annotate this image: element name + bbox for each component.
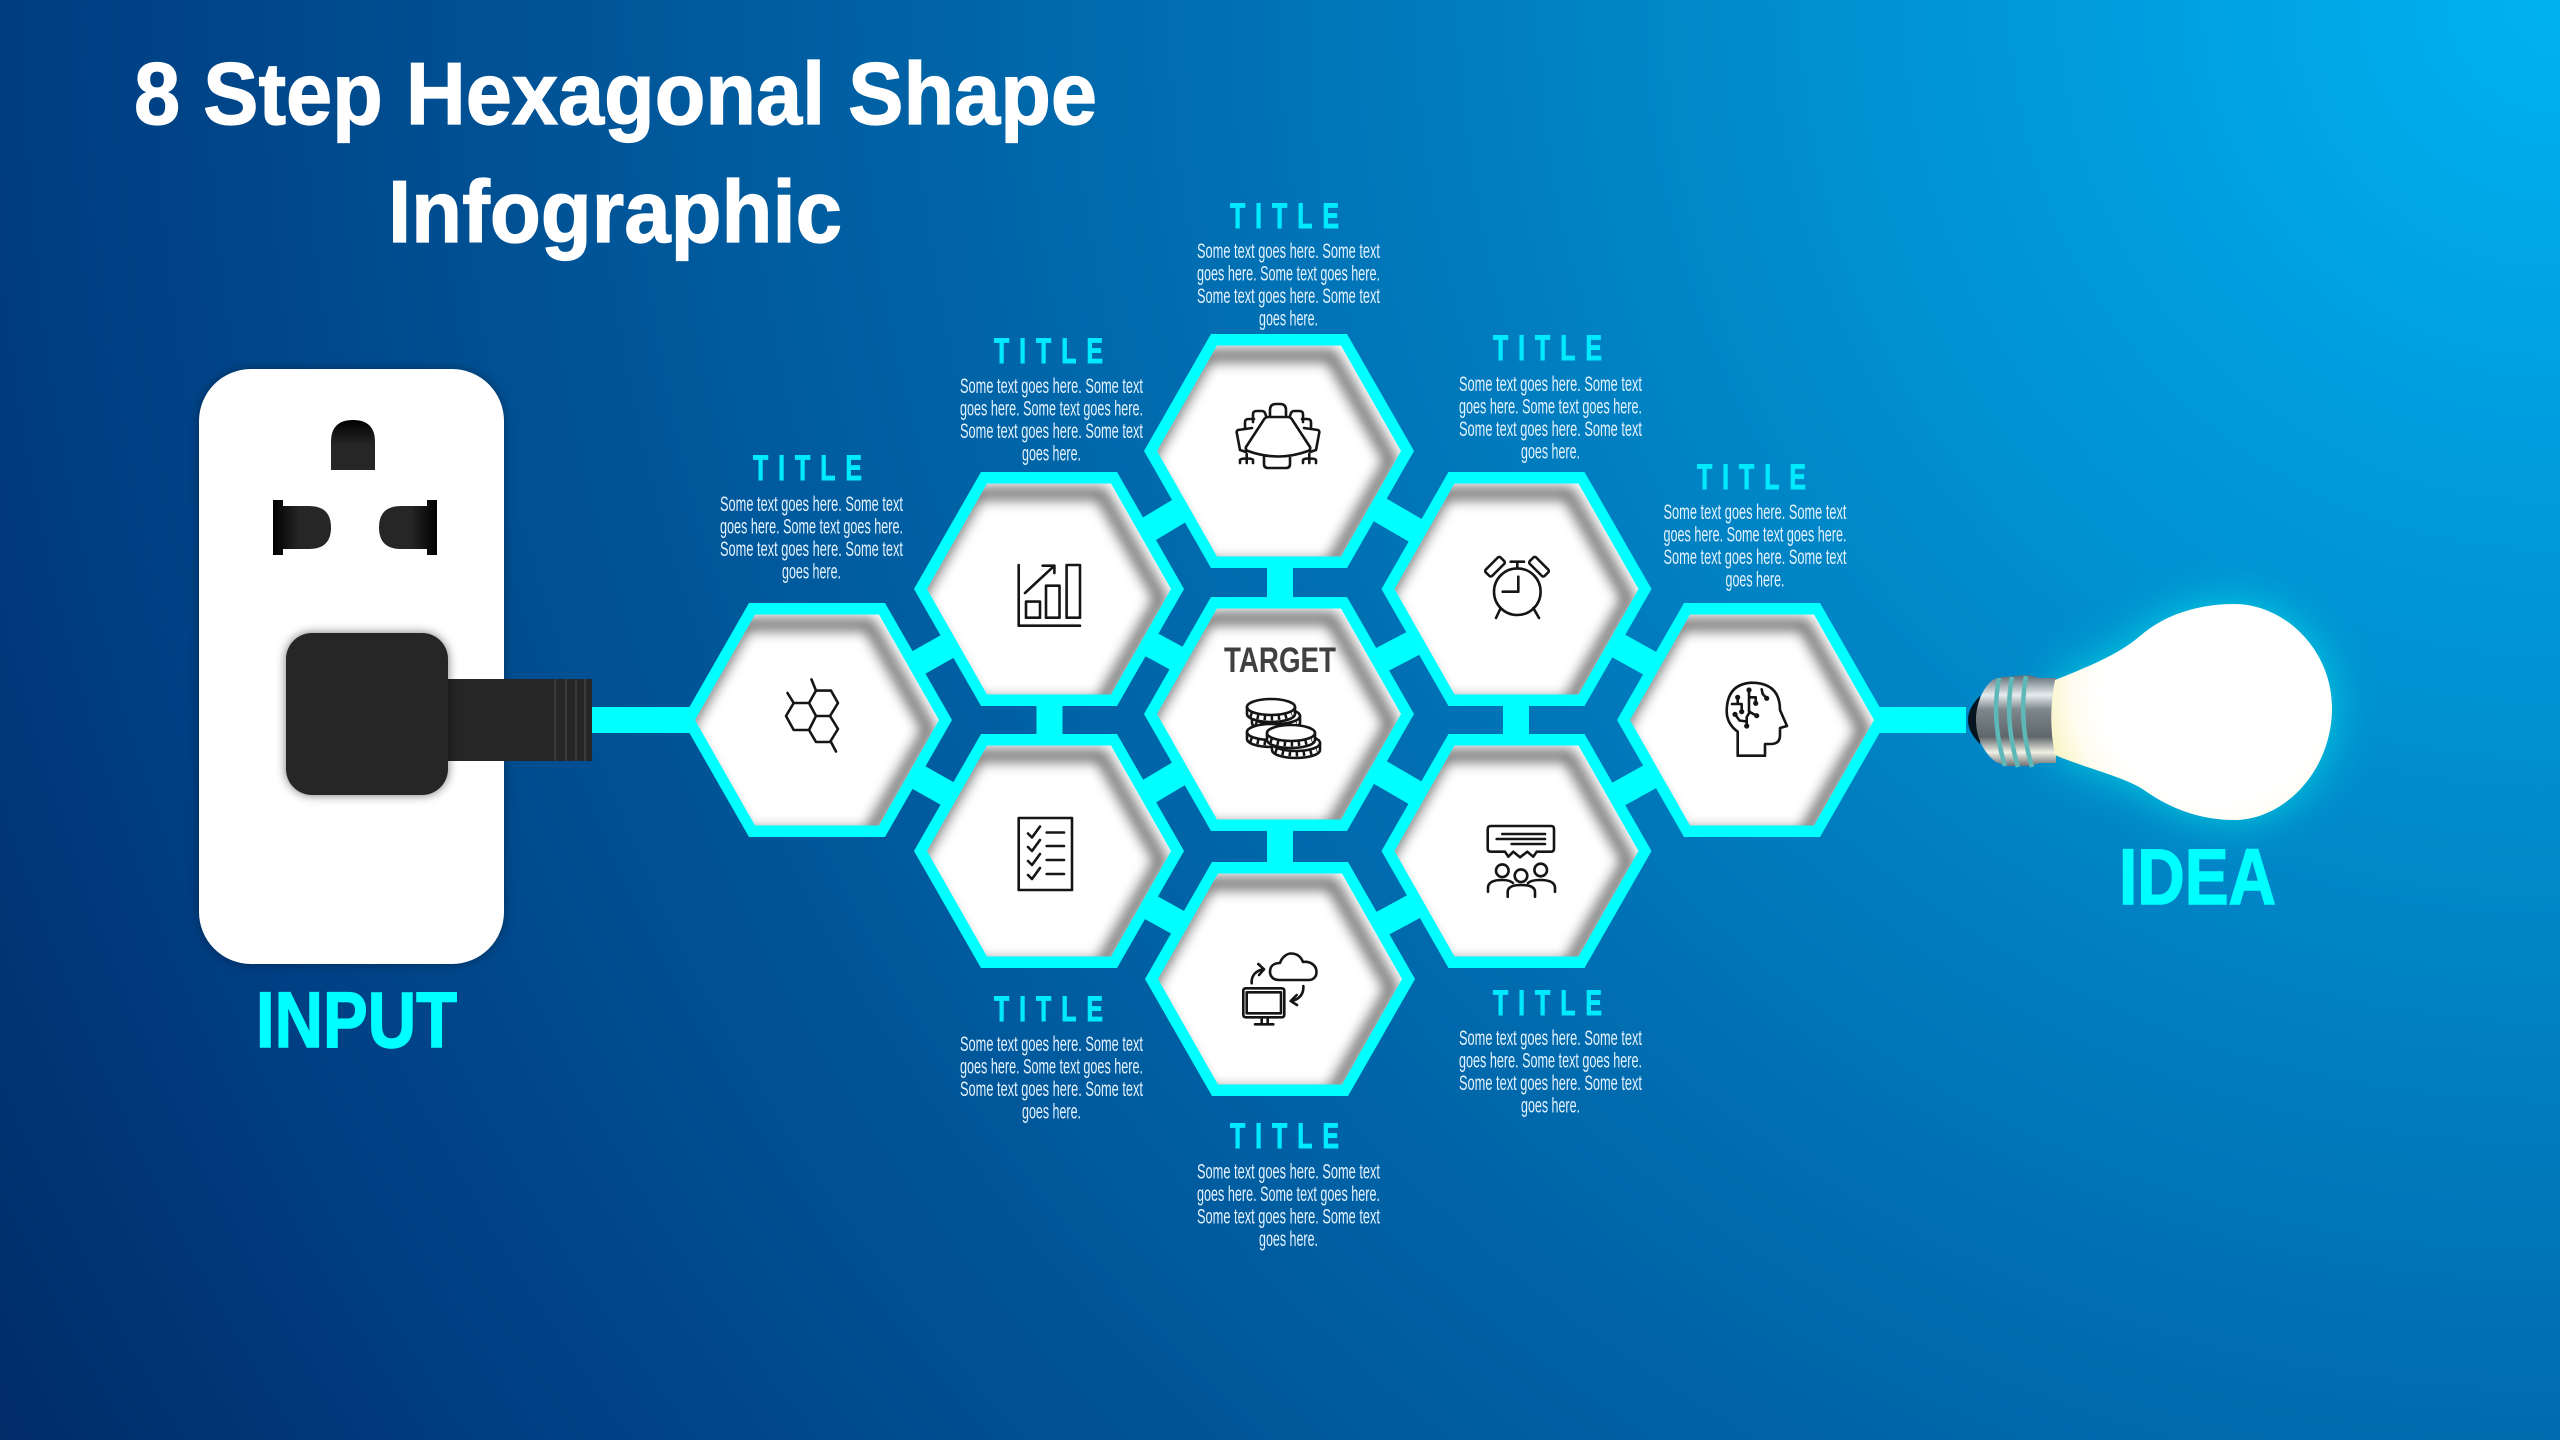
step: checklist bbox=[914, 734, 1184, 1124]
icon: conference table bbox=[1237, 404, 1319, 468]
step description: goes here. bbox=[1022, 1100, 1081, 1124]
step description bbox=[1197, 1160, 1380, 1251]
bulb glass bbox=[2051, 604, 2332, 820]
step description: Some text goes here. Some text bbox=[720, 538, 903, 561]
step description: goes here. Some text goes here. bbox=[1197, 1183, 1380, 1206]
icon: molecule bbox=[786, 680, 838, 752]
icon: alarm clock bbox=[1484, 556, 1550, 618]
hexagon bbox=[1617, 603, 1887, 837]
step heading: TITLE bbox=[994, 990, 1113, 1029]
label: IDEA: IDEA bbox=[2119, 832, 2276, 921]
step description: goes here. Some text goes here. bbox=[960, 1056, 1143, 1078]
step description: goes here. Some text goes here. bbox=[1664, 524, 1846, 546]
step description: goes here. bbox=[1726, 568, 1784, 592]
socket plate bbox=[199, 369, 504, 964]
step description: goes here. bbox=[1022, 442, 1081, 466]
hexagon bbox=[1144, 334, 1414, 568]
step description: goes here. Some text goes here. bbox=[1459, 1050, 1642, 1072]
step description: Some text goes here. Some text bbox=[1197, 240, 1380, 263]
socket holes bbox=[273, 420, 437, 555]
plug cord bbox=[440, 679, 592, 761]
step description bbox=[960, 375, 1143, 466]
step description bbox=[720, 493, 903, 584]
step description bbox=[1459, 1027, 1642, 1118]
icon: cloud and monitor bbox=[1243, 954, 1316, 1024]
icon: coins bbox=[1247, 699, 1320, 758]
step description: Some text goes here. Some text bbox=[960, 1033, 1143, 1056]
step description: goes here. bbox=[1259, 308, 1318, 330]
step description: Some text goes here. Some text bbox=[1664, 501, 1847, 524]
icon: people with speech bubble bbox=[1488, 826, 1555, 897]
hexagon bbox=[914, 734, 1184, 968]
step description: goes here. bbox=[1259, 1228, 1318, 1251]
step description bbox=[1664, 501, 1847, 592]
step heading: TITLE bbox=[753, 449, 872, 488]
icon: checklist bbox=[1019, 818, 1072, 890]
step description: goes here. Some text goes here. bbox=[960, 398, 1143, 420]
step: molecule bbox=[682, 449, 952, 837]
step: alarm clock bbox=[1382, 329, 1652, 706]
hexagon bbox=[1382, 472, 1652, 706]
title bbox=[134, 44, 1097, 261]
step description: goes here. Some text goes here. bbox=[1197, 262, 1380, 286]
step: AI brain head bbox=[1617, 458, 1887, 837]
step description: goes here. Some text goes here. bbox=[720, 516, 903, 538]
step heading: TITLE bbox=[1493, 329, 1612, 368]
step description: goes here. bbox=[1521, 440, 1580, 464]
step description: Some text goes here. Some text bbox=[1664, 546, 1847, 569]
step description: Some text goes here. Some text bbox=[960, 420, 1143, 443]
step description: goes here. bbox=[782, 560, 841, 584]
heading: TARGET: TARGET bbox=[1224, 641, 1336, 680]
panel: power socket with plug bbox=[199, 369, 592, 964]
step description bbox=[1459, 373, 1642, 464]
connector network bbox=[592, 451, 1966, 979]
step: team discussion bbox=[1382, 734, 1652, 1118]
step description: goes here. Some text goes here. bbox=[1459, 396, 1642, 418]
step: conference table bbox=[1144, 197, 1414, 568]
bulb glow bbox=[2055, 604, 2332, 820]
hexagon bbox=[1144, 597, 1414, 831]
step description: Some text goes here. Some text bbox=[1197, 1206, 1380, 1228]
step description bbox=[960, 1033, 1143, 1124]
step heading: TITLE bbox=[1230, 1117, 1349, 1156]
bulb screw base bbox=[1968, 675, 2056, 767]
hexagon bbox=[1145, 862, 1415, 1096]
icon: head with circuits bbox=[1727, 683, 1787, 756]
step description: Some text goes here. Some text bbox=[1459, 373, 1642, 396]
step description: Some text goes here. Some text bbox=[1459, 1027, 1642, 1050]
hexagon bbox=[1382, 734, 1652, 968]
step description: Some text goes here. Some text bbox=[1459, 1072, 1642, 1095]
step heading: TITLE bbox=[994, 332, 1113, 371]
step: growth chart bbox=[914, 332, 1184, 706]
step: cloud computing bbox=[1145, 862, 1415, 1251]
title: Infographic bbox=[388, 162, 842, 261]
centre: target bbox=[1144, 597, 1414, 831]
step heading: TITLE bbox=[1493, 984, 1612, 1023]
label: INPUT: INPUT bbox=[256, 975, 457, 1064]
step description: Some text goes here. Some text bbox=[960, 1078, 1143, 1101]
title: 8 Step Hexagonal Shape bbox=[134, 44, 1097, 143]
step description: Some text goes here. Some text bbox=[1197, 1160, 1380, 1184]
plug head bbox=[286, 633, 448, 795]
step description: Some text goes here. Some text bbox=[1197, 285, 1380, 308]
step description bbox=[1197, 240, 1380, 330]
step description: Some text goes here. Some text bbox=[1459, 418, 1642, 441]
step description: goes here. bbox=[1521, 1094, 1580, 1118]
hexagon bbox=[682, 603, 952, 837]
step heading: TITLE bbox=[1697, 458, 1816, 497]
step description: Some text goes here. Some text bbox=[960, 375, 1143, 398]
icon: bar chart bbox=[1019, 565, 1080, 626]
panel: light bulb bbox=[1968, 604, 2332, 820]
step heading: TITLE bbox=[1230, 197, 1349, 236]
step description: Some text goes here. Some text bbox=[720, 493, 903, 516]
hexagon bbox=[914, 472, 1184, 706]
